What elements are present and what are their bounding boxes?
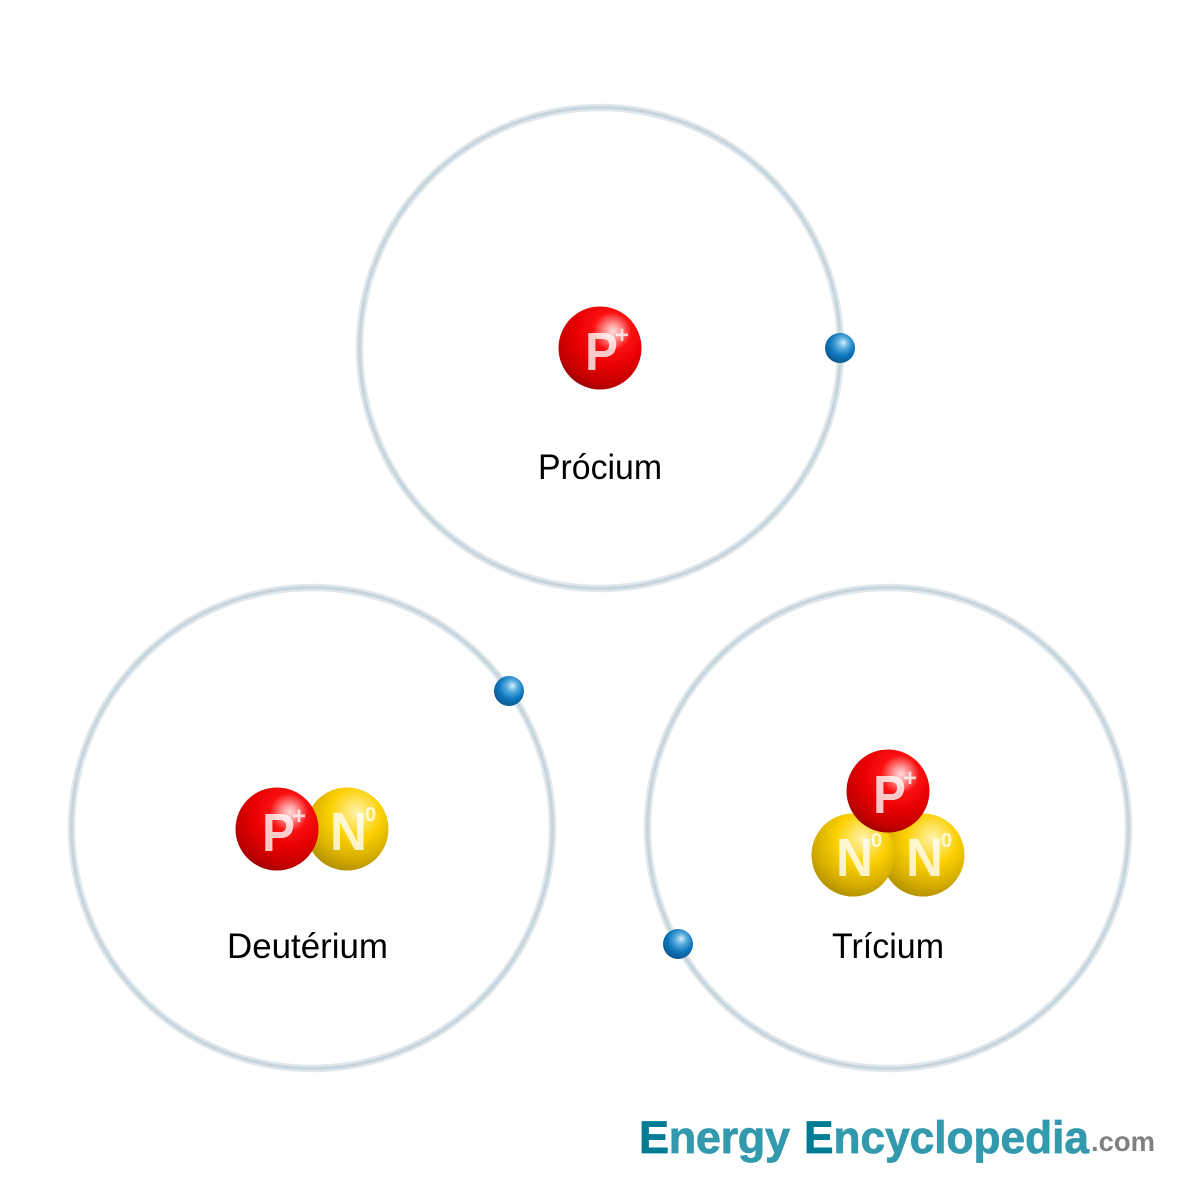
- atom: Deutérium: [72, 588, 552, 1068]
- neutron: 0: [365, 804, 376, 826]
- logo: Energy Encyclopedia.com: Encyclopedia: [804, 1112, 1090, 1163]
- proton: +: [903, 765, 917, 792]
- logo: Energy Encyclopedia.com: Energy: [639, 1112, 790, 1163]
- neutron left: 0: [871, 830, 882, 852]
- electron: [494, 676, 524, 706]
- label: Deutérium: Deutérium: [227, 927, 388, 966]
- neutron left: [812, 814, 894, 896]
- electron: [825, 333, 855, 363]
- label: Prócium: Prócium: [538, 448, 662, 487]
- atom: Prócium: [360, 108, 855, 588]
- orbit: Prócium: [360, 108, 840, 588]
- neutron right: 0: [941, 830, 952, 852]
- proton: P: [585, 322, 618, 382]
- orbit: Deutérium: [72, 588, 552, 1068]
- neutron left: N: [836, 828, 873, 888]
- neutron: N: [330, 802, 367, 862]
- neutron: [306, 788, 388, 870]
- logo: Energy Encyclopedia.com: [639, 1112, 1155, 1163]
- label: Trícium: Trícium: [832, 927, 944, 966]
- proton: [236, 788, 318, 870]
- electron: [663, 929, 693, 959]
- orbit: Trícium: [648, 588, 1128, 1068]
- proton: +: [292, 803, 306, 830]
- neutron right: [882, 814, 964, 896]
- proton: [558, 306, 642, 390]
- proton: P: [873, 765, 906, 825]
- proton: [846, 750, 930, 832]
- atom: Trícium: [648, 588, 1128, 1068]
- neutron right: N: [906, 828, 943, 888]
- logo: Energy Encyclopedia.com: .com: [1091, 1126, 1155, 1157]
- proton: P: [262, 803, 295, 863]
- proton: +: [615, 322, 629, 349]
